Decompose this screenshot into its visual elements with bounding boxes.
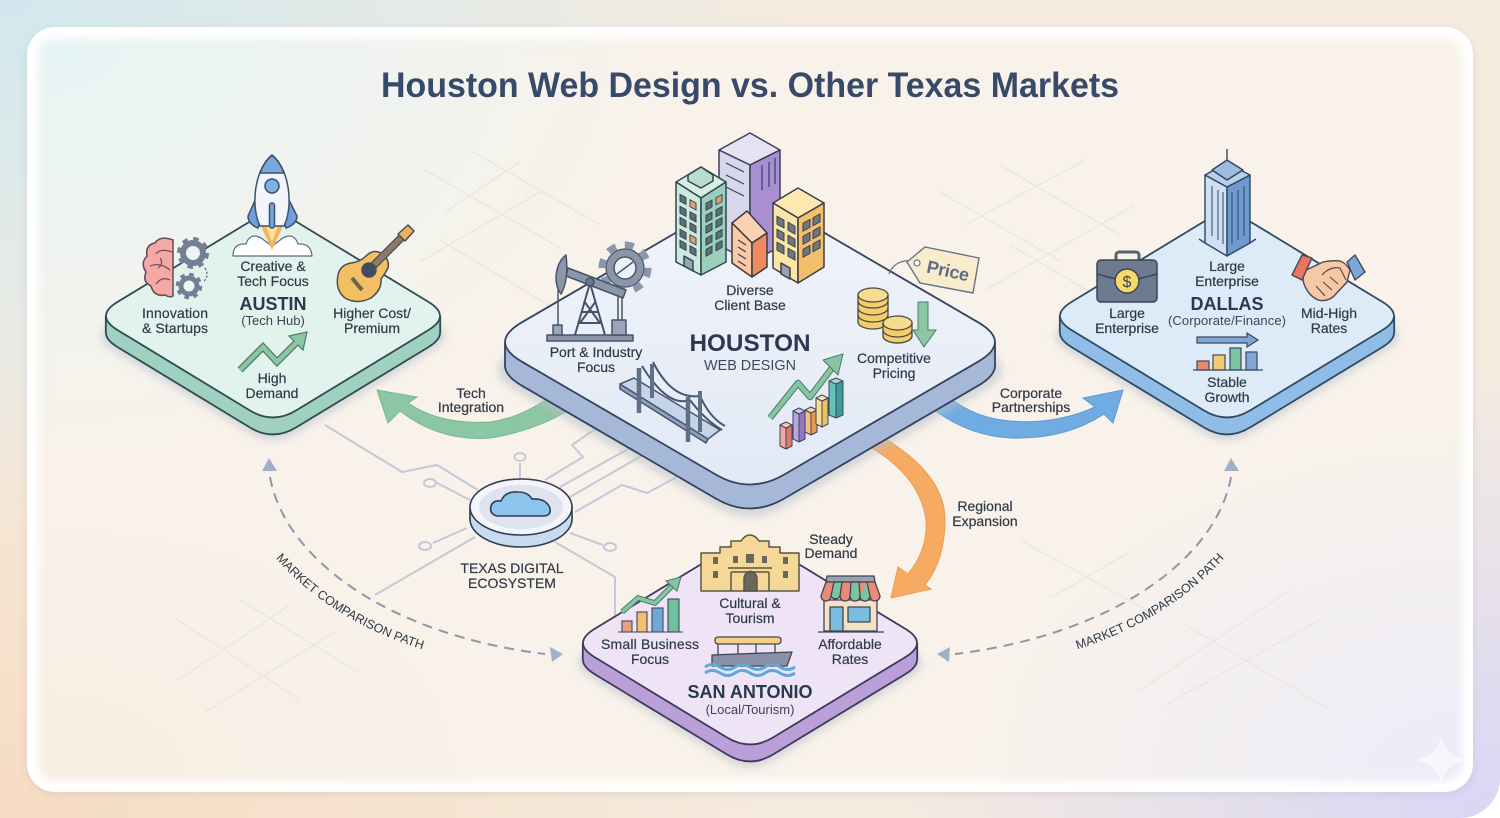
text: dallas labels: Large bbox=[1209, 258, 1245, 274]
icon: price tag bbox=[889, 247, 979, 293]
text: austin labels: Demand bbox=[246, 385, 298, 401]
text: arrow labels: Integration bbox=[438, 399, 504, 415]
icon: storefront bbox=[818, 576, 884, 632]
text: houston labels: Competitive bbox=[857, 350, 931, 366]
arrow: tech integration bbox=[377, 390, 566, 438]
icon: bridge bbox=[620, 362, 725, 443]
icon: green building bbox=[676, 167, 726, 275]
text: arrow labels bbox=[438, 385, 1070, 529]
icon: brain and gears bbox=[143, 238, 207, 298]
icon: oil pumpjack bbox=[547, 255, 633, 341]
text: hub label bbox=[460, 560, 564, 591]
icon: alamo bbox=[701, 535, 799, 591]
text: san antonio labels: SAN ANTONIO bbox=[687, 682, 813, 702]
text: san antonio labels: Cultural & bbox=[719, 595, 781, 611]
text: hub label: TEXAS DIGITAL bbox=[460, 560, 564, 576]
text: san antonio labels: Focus bbox=[631, 651, 669, 667]
dashed arrow: market comparison path left bbox=[262, 458, 563, 662]
text: dallas labels bbox=[1095, 258, 1357, 405]
icon: bar chart with rising arrow bbox=[770, 354, 843, 449]
title: Houston Web Design vs. Other Texas Markets bbox=[381, 66, 1119, 105]
icon: sparkle watermark bbox=[1417, 736, 1465, 784]
faint background grid lines bbox=[175, 150, 1330, 712]
text: dallas labels: DALLAS bbox=[1190, 294, 1264, 314]
text: san antonio labels: Demand bbox=[805, 545, 857, 561]
text: austin labels: Tech Focus bbox=[237, 273, 309, 289]
text: dallas labels: (Corporate/Finance) bbox=[1168, 313, 1286, 328]
panel: houston platform bbox=[498, 200, 1002, 517]
text: houston labels: Pricing bbox=[873, 365, 915, 381]
arrow: regional expansion bbox=[868, 438, 945, 598]
panel: austin platform bbox=[101, 215, 445, 440]
text: hub label: ECOSYSTEM bbox=[468, 575, 556, 591]
dashed arrow: market comparison path right bbox=[937, 458, 1239, 662]
icon: orange building bbox=[732, 211, 767, 277]
dashed arrow: market comparison path left: MARKET COMPARISON PATH bbox=[276, 553, 424, 650]
text: san antonio labels: (Local/Tourism) bbox=[706, 702, 794, 717]
text: arrow labels: Regional bbox=[957, 498, 1013, 514]
icon: briefcase bbox=[1097, 252, 1157, 302]
text: dallas labels: Enterprise bbox=[1195, 273, 1259, 289]
text: houston labels: Client Base bbox=[714, 297, 786, 313]
icon: coin stacks bbox=[858, 288, 912, 343]
text: austin labels: & Startups bbox=[142, 320, 208, 336]
text: austin labels bbox=[142, 258, 411, 401]
text: dallas labels: Growth bbox=[1204, 389, 1250, 405]
text: san antonio labels: Steady bbox=[809, 531, 853, 547]
text: arrow labels: Tech bbox=[456, 385, 486, 401]
text: austin labels: Innovation bbox=[142, 305, 208, 321]
icon: river boat bbox=[705, 637, 795, 676]
icon: gear bbox=[602, 245, 648, 291]
text: dallas labels: Large bbox=[1109, 305, 1145, 321]
text: houston labels: Focus bbox=[577, 359, 615, 375]
panel: san antonio platform bbox=[578, 542, 922, 767]
text: houston labels: WEB DESIGN bbox=[704, 357, 796, 374]
text: dallas labels: Mid-High bbox=[1301, 305, 1357, 321]
text: houston labels: Port & Industry bbox=[550, 344, 642, 360]
text: houston labels bbox=[550, 282, 931, 381]
icon: skyscraper bbox=[1199, 149, 1256, 256]
circuit lines: digital ecosystem network bbox=[325, 425, 677, 617]
text: arrow labels: Partnerships bbox=[992, 399, 1070, 415]
icon: briefcase: $ bbox=[1123, 274, 1132, 291]
icon: guitar bbox=[337, 225, 414, 302]
text: austin labels: (Tech Hub) bbox=[241, 313, 305, 328]
text: san antonio labels: Affordable bbox=[818, 636, 882, 652]
icon: yellow building bbox=[773, 188, 824, 283]
text: san antonio labels: Small Business bbox=[601, 636, 699, 652]
text: austin labels: Higher Cost/ bbox=[333, 305, 411, 321]
text: austin labels: Premium bbox=[344, 320, 400, 336]
text: san antonio labels: Tourism bbox=[725, 610, 775, 626]
icon: down arrow bbox=[913, 302, 936, 347]
text: arrow labels: Expansion bbox=[952, 513, 1018, 529]
text: dallas labels: Rates bbox=[1311, 320, 1347, 336]
text: arrow labels: Corporate bbox=[1000, 385, 1062, 401]
dashed arrow: market comparison path right: MARKET COMPARISON PATH bbox=[1076, 553, 1224, 649]
text: houston labels: HOUSTON bbox=[690, 330, 810, 357]
icon: purple tower bbox=[719, 133, 780, 262]
panel: dallas platform bbox=[1055, 215, 1399, 440]
icon: digital hub with cloud bbox=[470, 479, 572, 547]
text: austin labels: High bbox=[258, 370, 286, 386]
arrow: corporate partnerships bbox=[934, 390, 1123, 438]
text: austin labels: AUSTIN bbox=[240, 294, 306, 314]
text: san antonio labels: Rates bbox=[832, 651, 868, 667]
text: dallas labels: Stable bbox=[1207, 374, 1247, 390]
icon: stable growth chart bbox=[1193, 333, 1263, 370]
icon: high demand arrow bbox=[240, 332, 307, 370]
text: houston labels: Diverse bbox=[726, 282, 774, 298]
icon: rocket bbox=[233, 155, 312, 256]
text: dallas labels: Enterprise bbox=[1095, 320, 1159, 336]
icon: price tag: Price bbox=[925, 257, 971, 285]
icon: small business chart bbox=[618, 577, 683, 632]
icon: handshake bbox=[1292, 255, 1365, 301]
text: austin labels: Creative & bbox=[240, 258, 306, 274]
text: san antonio labels bbox=[601, 531, 882, 717]
